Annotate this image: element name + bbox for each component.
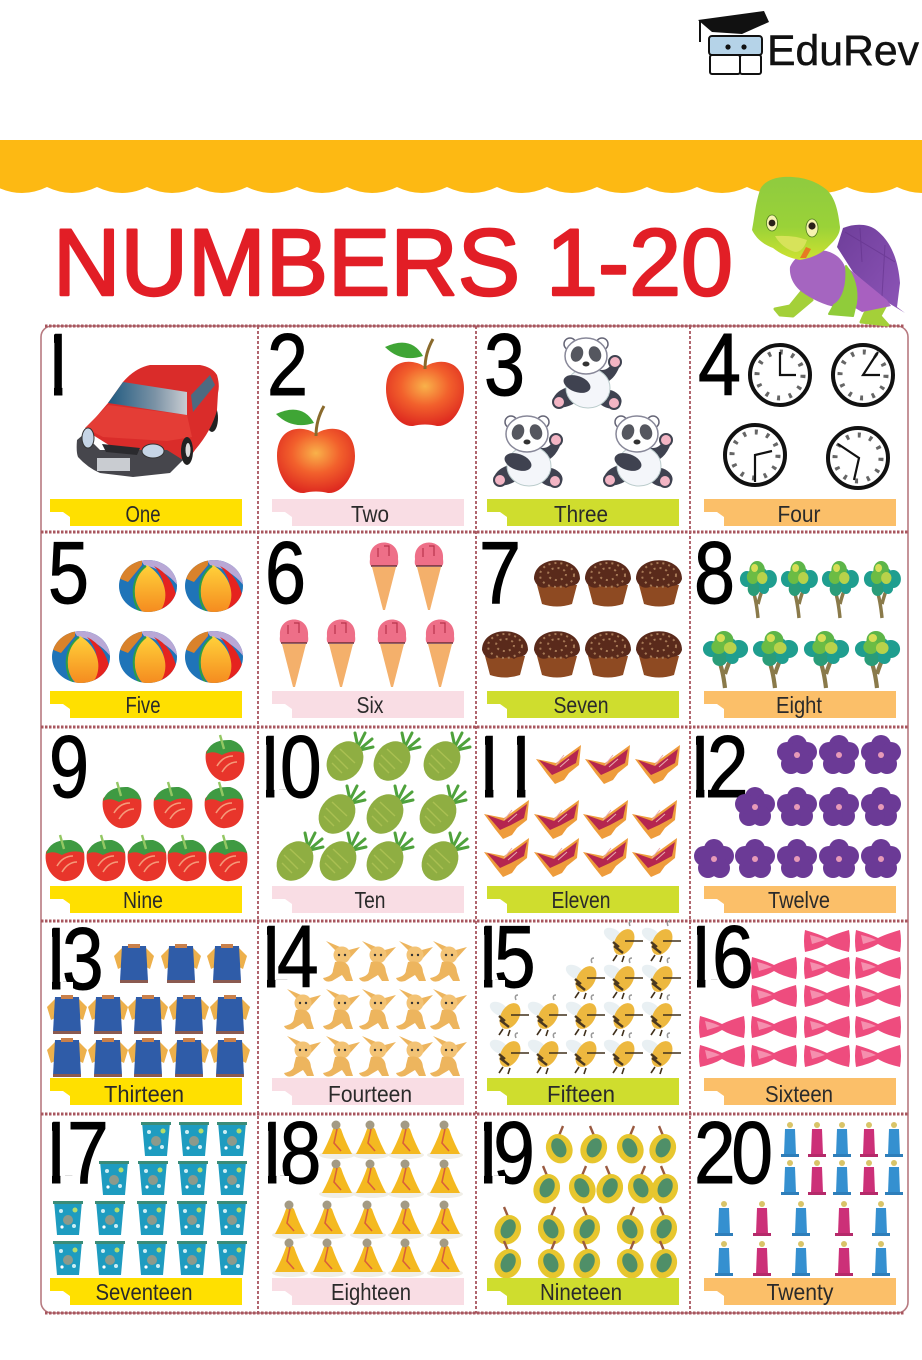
- numeral 4: 4: [698, 315, 741, 414]
- panel: number 14: [267, 926, 467, 1105]
- numeral 16: 16: [679, 908, 754, 1006]
- banner: scalloped yellow band: [0, 140, 922, 193]
- label: Eleven: Eleven: [552, 887, 610, 913]
- label: Five: Five: [126, 692, 160, 718]
- label: Eight: Eight: [776, 692, 823, 718]
- numeral 2: 2: [267, 315, 308, 414]
- panel: number 2: [258, 315, 476, 532]
- numeral 17: 17: [34, 1104, 109, 1202]
- panel: number 15: [484, 920, 681, 1105]
- panel: number 20: [690, 1104, 908, 1313]
- icon: graduation cap book: [698, 11, 769, 74]
- logo: EduRev: [698, 11, 919, 75]
- label: Eighteen: [272, 1278, 464, 1305]
- icons: ten pineapples: [269, 733, 470, 888]
- label: Sixteen: Sixteen: [765, 1081, 833, 1107]
- numeral 3: 3: [484, 315, 525, 414]
- icons: nineteen spinning tops: [490, 1126, 683, 1283]
- numeral 19: 19: [466, 1104, 535, 1202]
- label: Twelve: [704, 886, 896, 913]
- numeral 15: 15: [466, 908, 536, 1006]
- numeral 7: 7: [479, 523, 521, 622]
- icons: six ice creams: [280, 542, 454, 687]
- panel: number 8: [690, 523, 908, 727]
- numeral 13: 13: [34, 910, 104, 1008]
- icons: nine strawberries: [46, 735, 247, 881]
- label: Four: Four: [778, 501, 821, 527]
- icons: five balls: [51, 559, 244, 684]
- panel: number 1: [50, 334, 242, 526]
- label: Fourteen: Fourteen: [328, 1081, 412, 1107]
- icons: two apples: [276, 339, 464, 493]
- icons: fifteen bees: [487, 921, 681, 1074]
- label: Thirteen: [50, 1078, 242, 1107]
- label: Nineteen: [487, 1278, 679, 1305]
- label: Thirteen: Thirteen: [104, 1081, 184, 1107]
- label: Fifteen: Fifteen: [547, 1081, 615, 1107]
- label: Three: Three: [554, 501, 608, 527]
- title: NUMBERS 1-20: [53, 210, 733, 316]
- icons: twelve flowers: [694, 735, 901, 878]
- panel: number 6: [258, 523, 476, 727]
- numeral 11: 11: [467, 718, 541, 816]
- numeral 14: 14: [249, 908, 319, 1006]
- numeral 18: 18: [250, 1104, 321, 1202]
- panel: number 7: [476, 523, 690, 727]
- label: Five: [50, 691, 242, 718]
- panel: number 11: [484, 736, 680, 913]
- icons: four clocks: [725, 345, 893, 488]
- icons: eight trees: [703, 561, 901, 688]
- icons: seven muffins: [482, 560, 682, 678]
- numeral 10: 10: [248, 718, 322, 816]
- grid: dashed card frame: [41, 326, 908, 1313]
- icons: seventeen cups: [53, 1122, 247, 1275]
- label: Sixteen: [704, 1078, 896, 1107]
- numeral 1: 1: [36, 316, 78, 414]
- panel: number 5: [41, 523, 258, 727]
- label: Eleven: [487, 886, 679, 913]
- panel: number 13: [47, 927, 250, 1105]
- label: Nineteen: Nineteen: [540, 1279, 622, 1305]
- numeral 6: 6: [265, 523, 306, 622]
- label: Nine: [50, 886, 242, 913]
- label: Six: [272, 691, 464, 718]
- label: Twelve: Twelve: [768, 887, 830, 913]
- icons: eleven butterflies: [484, 745, 680, 877]
- icons: eighteen party hats: [272, 1120, 463, 1277]
- label: Four: [704, 499, 896, 527]
- label: One: [50, 499, 242, 527]
- panel: number 19: [484, 1121, 679, 1305]
- label: One: One: [126, 501, 160, 527]
- panel: number 16: [697, 925, 901, 1105]
- numeral 5: 5: [48, 523, 89, 622]
- panel: number 18: [268, 1120, 464, 1305]
- icons: three pandas: [491, 338, 675, 490]
- label: Twenty: Twenty: [766, 1279, 834, 1305]
- panel: number 17: [50, 1122, 247, 1305]
- label: Two: [272, 499, 464, 527]
- panel: number 9: [41, 717, 258, 921]
- icons: sixteen bows: [699, 930, 901, 1067]
- label: Twenty: [704, 1278, 896, 1305]
- icons: fourteen kangaroos: [284, 941, 467, 1077]
- label: Seventeen: Seventeen: [96, 1279, 192, 1305]
- label: Nine: Nine: [123, 887, 163, 913]
- numeral 12: 12: [678, 718, 749, 816]
- brand name: EduRev: [767, 27, 919, 75]
- label: Seventeen: [50, 1278, 242, 1305]
- icons: thirteen shirts: [47, 944, 250, 1077]
- panel: number 4: [690, 315, 908, 532]
- icons: twenty candles: [715, 1122, 903, 1276]
- icon: red car: [77, 365, 219, 477]
- label: Fifteen: [487, 1078, 679, 1107]
- label: Three: [487, 499, 679, 527]
- numeral 20: 20: [694, 1104, 773, 1202]
- panel: number 12: [694, 735, 901, 913]
- label: Ten: Ten: [354, 887, 386, 913]
- panel: number 3: [476, 315, 690, 532]
- panel: number 10: [266, 731, 472, 913]
- label: Fourteen: [272, 1078, 464, 1107]
- label: Eight: [704, 691, 896, 718]
- icon: turtle mascot: [752, 177, 905, 325]
- numeral 9: 9: [49, 717, 89, 816]
- label: Eighteen: Eighteen: [331, 1279, 411, 1305]
- label: Six: Six: [356, 692, 384, 718]
- label: Seven: [487, 691, 679, 718]
- label: Two: Two: [351, 501, 389, 527]
- label: Seven: Seven: [554, 692, 608, 718]
- numeral 8: 8: [694, 523, 735, 622]
- label: Ten: [272, 886, 464, 913]
